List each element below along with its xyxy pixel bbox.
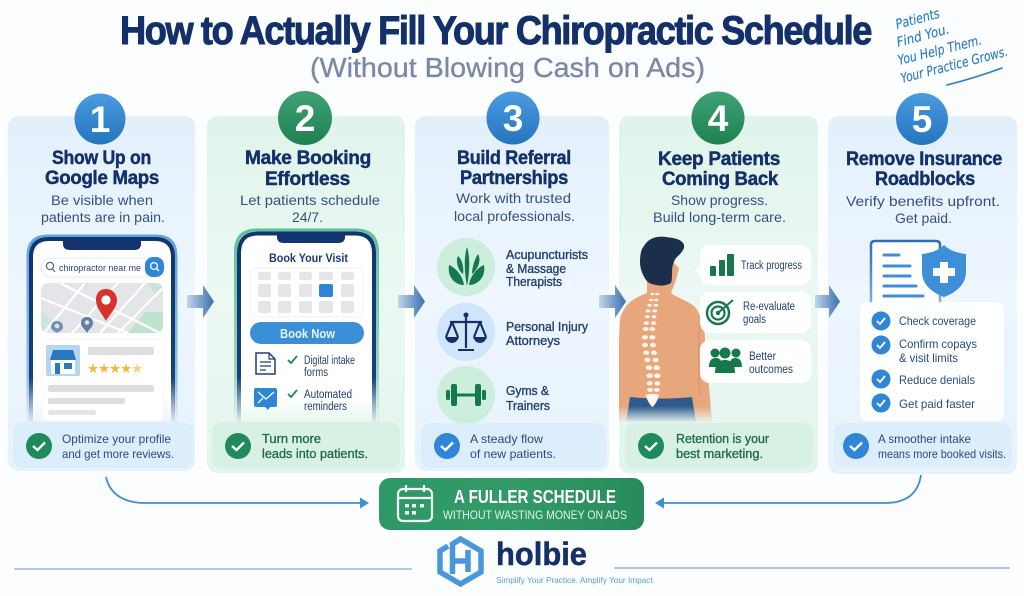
heading 1: Google Maps — [45, 168, 159, 189]
panel 4: retention — [619, 92, 818, 473]
phone with booking calendar: Book Your Visit — [269, 251, 348, 265]
card: re-evaluate goals — [700, 292, 811, 333]
description 2: 24/7. — [292, 209, 323, 225]
description 1: Be visible when — [51, 192, 153, 208]
digital intake forms: Digital intake — [304, 355, 355, 367]
heading 2: Effortless — [265, 169, 350, 190]
card: better outcomes — [700, 340, 811, 383]
callout 3 — [421, 423, 606, 468]
heading 5: Remove Insurance — [846, 149, 1002, 170]
callout 1: Optimize your profile — [62, 432, 171, 446]
description 1: patients are in pain. — [41, 209, 165, 225]
panel 2: booking — [207, 91, 405, 473]
callout 2: leads into patients. — [262, 447, 368, 461]
referral: acupuncturists and massage therapists: Therapists — [506, 275, 562, 289]
coverage checklist: Confirm copays — [899, 337, 977, 351]
callout 4: Retention is your — [676, 432, 769, 446]
subtitle: (Without Blowing Cash on Ads) — [310, 52, 705, 83]
panel 5: insurance — [828, 93, 1017, 474]
arrow 2 to 3 — [398, 285, 425, 318]
phone with map search — [28, 236, 176, 425]
arrow 1 to 2 — [187, 285, 214, 318]
handwritten note: You Help Them. — [896, 33, 983, 69]
phone with booking calendar — [236, 230, 378, 425]
callout 1 — [13, 422, 193, 468]
description 5: Get paid. — [895, 210, 952, 226]
coverage checklist: Reduce denials — [899, 373, 975, 387]
digital intake forms — [256, 353, 355, 379]
phone with map search: ★ — [120, 361, 132, 377]
heading 3: Partnerships — [460, 168, 568, 189]
callout 4 — [625, 423, 813, 468]
step number 5 — [896, 93, 948, 145]
description 4: Show progress. — [671, 192, 768, 208]
handwritten note: Find You. — [895, 21, 951, 51]
card: re-evaluate goals: Re-evaluate — [743, 301, 795, 313]
automated reminders: reminders — [304, 401, 347, 413]
referral: personal injury attorneys: Personal Injury — [506, 320, 589, 334]
icon: holbie logo — [440, 539, 481, 584]
callout 1: and get more reviews. — [62, 447, 174, 461]
referral: gyms and trainers: Trainers — [506, 399, 550, 413]
callout 4: best marketing. — [676, 447, 763, 461]
referral: gyms and trainers — [437, 366, 550, 424]
title: How to Actually Fill Your Chiropractic Schedule — [120, 9, 871, 53]
referral: gyms and trainers: Gyms & — [506, 384, 550, 398]
heading 4: Keep Patients — [658, 149, 780, 170]
phone with map search: ★ — [109, 361, 121, 377]
step number 2 — [278, 91, 332, 145]
heading 3: Build Referral — [457, 148, 571, 169]
icon: calendar — [398, 485, 432, 521]
card: track progress — [694, 245, 811, 285]
referral: personal injury attorneys: Attorneys — [506, 334, 560, 348]
heading 4: Coming Back — [662, 169, 779, 190]
description 3: Work with trusted — [456, 190, 571, 206]
panel 3: referrals — [415, 92, 609, 471]
heading 2 — [245, 148, 371, 190]
heading 1 — [45, 148, 159, 189]
heading 3 — [457, 148, 571, 189]
step number 4: 4 — [708, 98, 729, 139]
document and shield icon — [871, 241, 966, 303]
automated reminders: Automated — [304, 389, 352, 401]
connector left to result — [106, 477, 369, 508]
handwritten note — [894, 6, 1009, 87]
arrow 4 to 5 — [815, 285, 840, 318]
phone with map search: chiropractor near me — [59, 263, 141, 274]
heading 4 — [658, 149, 780, 190]
connector right to result — [655, 475, 921, 508]
arrow 3 to 4 — [599, 285, 626, 318]
person with spine — [619, 237, 719, 423]
map — [41, 283, 165, 333]
tagline: Simplify Your Practice. Amplify Your Impact. — [496, 575, 655, 585]
calendar grid — [250, 268, 363, 317]
coverage checklist: & visit limits — [899, 351, 958, 365]
Book Now button — [250, 322, 364, 344]
description 4: Build long-term care. — [653, 209, 786, 225]
callout 3: of new patients. — [470, 447, 556, 461]
coverage checklist: Check coverage — [899, 314, 976, 328]
description 2: Let patients schedule — [240, 192, 380, 208]
callout 3: A steady flow — [470, 432, 543, 446]
step number 3 — [486, 92, 540, 144]
digital intake forms: forms — [304, 367, 328, 379]
step number 5: 5 — [912, 99, 932, 140]
phone with map search: ★ — [87, 361, 99, 377]
spine — [642, 293, 661, 407]
result banner — [379, 478, 644, 530]
heading 2: Make Booking — [245, 148, 371, 169]
callout 5: means more booked visits. — [878, 447, 1006, 461]
referral: acupuncturists and massage therapists: Acupuncturists — [506, 248, 588, 262]
callout 2: Turn more — [262, 432, 321, 446]
automated reminders — [254, 388, 352, 413]
card: better outcomes: Better — [749, 351, 776, 363]
callout 5: A smoother intake — [878, 432, 971, 446]
referral: acupuncturists and massage therapists — [437, 238, 588, 296]
step number 1: 1 — [90, 99, 110, 140]
step number 2: 2 — [295, 98, 315, 139]
heading 1: Show Up on — [52, 148, 151, 169]
card: track progress: Track progress — [741, 260, 802, 272]
description 1 — [41, 192, 165, 225]
listing card — [43, 339, 163, 421]
card: re-evaluate goals: goals — [743, 314, 766, 326]
panel 1: Google Maps — [8, 94, 195, 471]
callout 5 — [834, 423, 1012, 468]
step number 4 — [692, 92, 744, 144]
heading 5 — [846, 149, 1002, 190]
coverage checklist — [860, 302, 1004, 421]
step number 1 — [74, 94, 126, 144]
coverage checklist: Get paid faster — [899, 397, 975, 411]
description 3 — [454, 190, 575, 224]
description 4 — [653, 192, 786, 225]
description 3: local professionals. — [454, 208, 575, 224]
description 5 — [846, 193, 1000, 226]
heading 5: Roadblocks — [875, 169, 975, 190]
result banner: A FULLER SCHEDULE — [454, 487, 616, 507]
description 2 — [240, 192, 380, 225]
referral: personal injury attorneys — [437, 303, 589, 361]
handwritten note: Patients — [894, 6, 942, 33]
callout 2 — [212, 422, 400, 468]
description 5: Verify benefits upfront. — [846, 193, 1000, 209]
phone with map search: ★ — [98, 361, 110, 377]
card: better outcomes: outcomes — [749, 364, 793, 376]
Book Now button: Book Now — [280, 327, 335, 341]
result banner: WITHOUT WASTING MONEY ON ADS — [443, 510, 627, 522]
referral: acupuncturists and massage therapists: & Massage — [506, 262, 566, 276]
step number 3: 3 — [503, 98, 523, 139]
phone with map search: ★ — [131, 361, 143, 377]
brand name: holbie — [496, 536, 587, 572]
